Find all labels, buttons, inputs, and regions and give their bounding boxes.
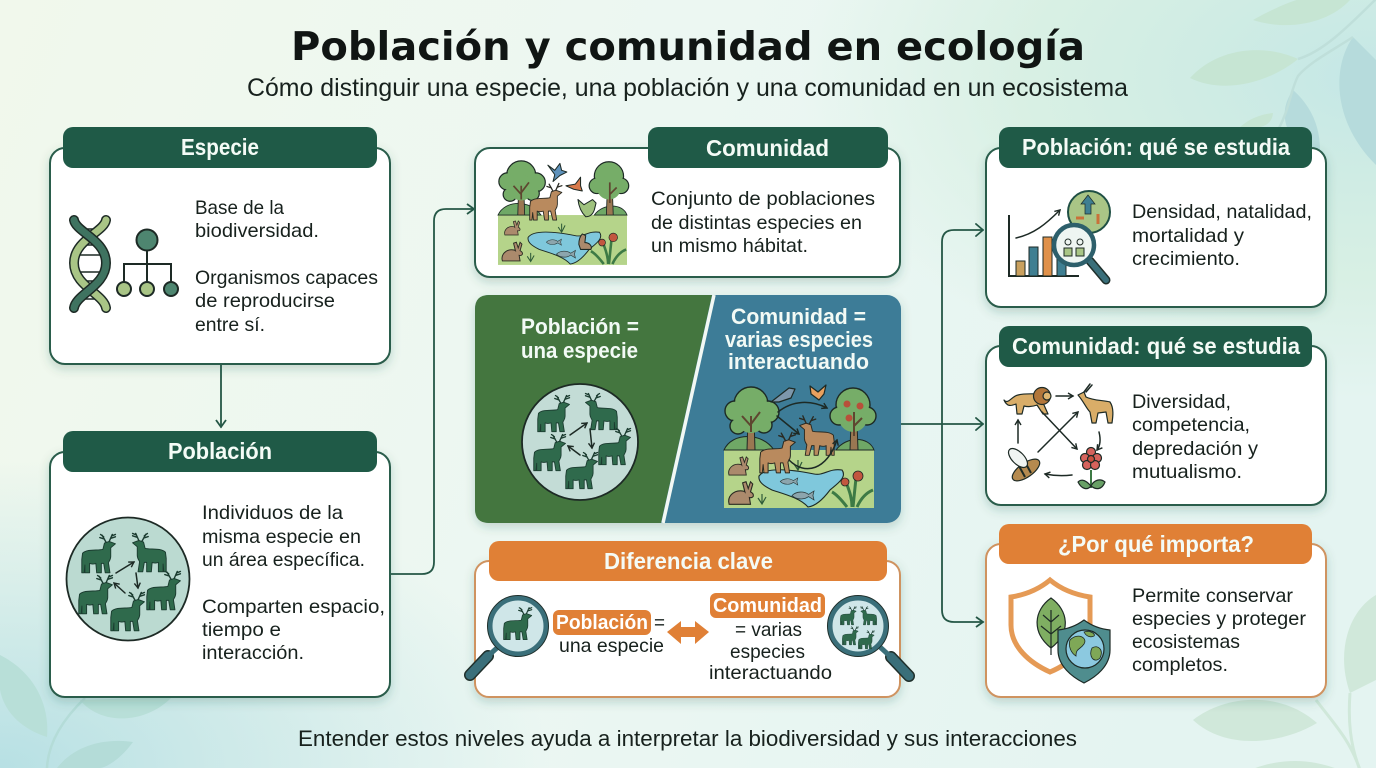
- label: poblacion = una especie: una especie: [559, 635, 664, 657]
- arrow: especie to poblacion: [220, 364, 222, 427]
- header: poblacion: [63, 431, 377, 472]
- text: poblacion: misma especie en: [202, 526, 361, 548]
- panel: diferencia clave: [470, 541, 909, 697]
- text: poblacion: Individuos de la: [202, 502, 343, 524]
- text: comunidad: un mismo hábitat.: [651, 235, 808, 257]
- icon: habitat scene: [498, 161, 629, 265]
- title: Población y comunidad en ecología: [291, 25, 1085, 70]
- icon: deer population: [66, 518, 190, 640]
- header: especie: Especie: [181, 134, 259, 160]
- label: comunidad = varias especies: [709, 593, 832, 684]
- icon: hierarchy: [117, 230, 178, 296]
- header: poblacion: Población: [168, 438, 272, 464]
- label: poblacion = una especie: Población: [556, 612, 648, 634]
- text: comunidad: [651, 188, 875, 257]
- text: diversidad: [1132, 391, 1258, 483]
- text: permite: ecosistemas: [1132, 631, 1240, 653]
- arrows: [1056, 395, 1073, 397]
- icon: food web: [1004, 384, 1113, 489]
- icon: chart and magnifier: [1009, 191, 1110, 280]
- arrows: comparison to study panels: [901, 230, 983, 622]
- arrow: double orange: [667, 621, 709, 644]
- text: especie: entre sí.: [195, 314, 265, 336]
- bee: [1009, 455, 1043, 485]
- text: densidad: [1132, 201, 1312, 270]
- text: permite: completos.: [1132, 654, 1228, 676]
- text: especie: Base de la: [195, 197, 284, 219]
- text: poblacion: un área específica.: [202, 549, 365, 571]
- text: diversidad: competencia,: [1132, 414, 1250, 436]
- heading: comunidad = varias especies: varias especies: [725, 327, 873, 352]
- heading: poblacion = una especie: Población =: [521, 314, 639, 339]
- heading: poblacion = una especie: una especie: [521, 338, 638, 363]
- text: diversidad: depredación y: [1132, 438, 1258, 460]
- lion: [1004, 394, 1048, 414]
- text: especie: de reproducirse: [195, 290, 335, 312]
- panel: comunidad: [475, 127, 900, 277]
- text: poblacion: Comparten espacio,: [202, 596, 385, 618]
- panel: comunidad que se estudia: [986, 326, 1326, 505]
- text: diversidad: mutualismo.: [1132, 461, 1242, 483]
- panel: poblacion que se estudia: [986, 127, 1326, 307]
- icon: community scene: [724, 385, 876, 508]
- heading: comunidad = varias especies: Comunidad =: [731, 304, 866, 329]
- divider: [663, 295, 714, 523]
- heading: poblacion = una especie: [521, 314, 639, 363]
- text: especie: Organismos capaces: [195, 267, 378, 289]
- text: densidad: mortalidad y: [1132, 225, 1244, 247]
- header: comunidad: Comunidad: [706, 135, 829, 161]
- panel: comparison: [475, 295, 901, 523]
- icon: dna: [74, 220, 106, 308]
- text: permite: especies y proteger: [1132, 608, 1307, 630]
- text: especie: [195, 197, 378, 336]
- text: permite: Permite conservar: [1132, 585, 1294, 607]
- flower: [1090, 470, 1092, 488]
- text: permite: [1132, 585, 1307, 676]
- label: comunidad = varias especies: = varias: [735, 619, 802, 641]
- header: por que importa: [999, 524, 1312, 564]
- panel: poblacion: [50, 431, 390, 697]
- subtitle: Cómo distinguir una especie, una población y una comunidad en un ecosistema: [247, 74, 1128, 102]
- header: especie: [63, 127, 377, 168]
- gazelle: [1078, 392, 1113, 423]
- panel: por que importa: [986, 524, 1326, 697]
- icon: deer population circle: [522, 384, 638, 500]
- header: por que importa: ¿Por qué importa?: [1058, 531, 1254, 557]
- label: poblacion = una especie: [553, 610, 665, 657]
- arrow: poblacion to comunidad: [390, 209, 474, 574]
- text: especie: biodiversidad.: [195, 220, 319, 242]
- icon: magnifier one deer: [470, 596, 548, 675]
- label: poblacion = una especie: =: [654, 612, 665, 634]
- text: poblacion: tiempo e: [202, 619, 281, 641]
- text: poblacion: interacción.: [202, 642, 304, 664]
- arrowheads: [976, 224, 983, 430]
- header: poblacion que se estudia: [999, 127, 1312, 168]
- header: comunidad que se estudia: Comunidad: qué se estudia: [1012, 333, 1300, 359]
- footer text: Entender estos niveles ayuda a interpretar la biodiversidad y sus interacciones: [298, 726, 1077, 751]
- text: diversidad: Diversidad,: [1132, 391, 1231, 413]
- label: comunidad = varias especies: Comunidad: [713, 595, 822, 617]
- text: densidad: Densidad, natalidad,: [1132, 201, 1312, 223]
- text: poblacion: [202, 502, 385, 664]
- text: comunidad: de distintas especies en: [651, 212, 862, 234]
- header: poblacion que se estudia: Población: qué se estudia: [1022, 134, 1290, 160]
- text: densidad: crecimiento.: [1132, 248, 1240, 270]
- icon: magnifier many deer: [828, 596, 909, 676]
- header: comunidad: [648, 127, 888, 168]
- icon: shield, leaf and globe: [1009, 578, 1110, 683]
- text: comunidad: Conjunto de poblaciones: [651, 188, 875, 210]
- header: diferencia clave: [489, 541, 887, 581]
- heading: comunidad = varias especies: [725, 304, 873, 374]
- panel: especie: [50, 127, 390, 364]
- heading: comunidad = varias especies: interactuando: [728, 349, 869, 374]
- header: diferencia clave: Diferencia clave: [604, 548, 773, 574]
- left side: poblacion: [475, 295, 712, 523]
- header: comunidad que se estudia: [999, 326, 1312, 367]
- label: comunidad = varias especies: especies: [730, 641, 805, 663]
- label: comunidad = varias especies: interactuando: [709, 662, 832, 684]
